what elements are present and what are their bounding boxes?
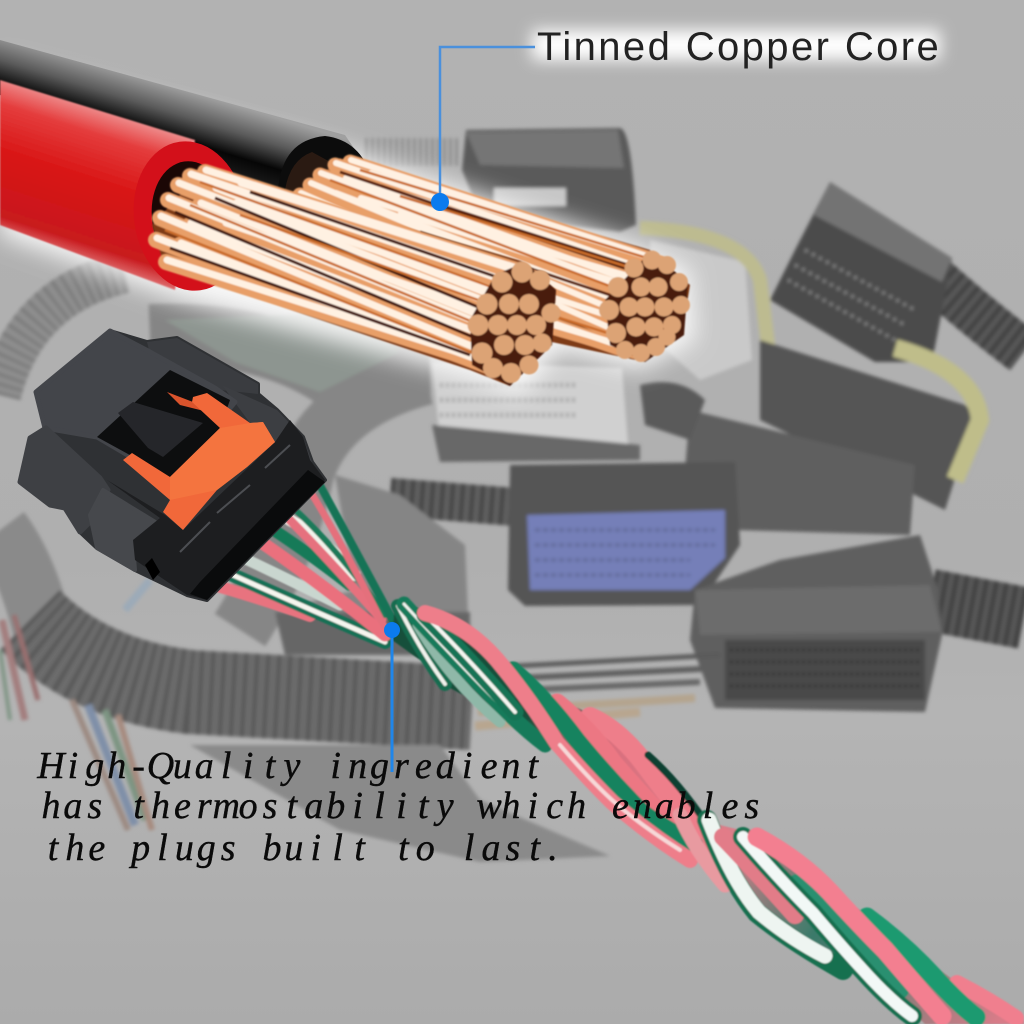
orange latch — [123, 393, 275, 530]
description text: the plugs built to last. — [48, 827, 558, 869]
callout: high-quality ingredient — [36, 622, 759, 869]
description text: High-Quality ingredient — [36, 745, 540, 787]
connector silhouette — [20, 331, 325, 600]
leader line — [390, 630, 394, 772]
leader line — [440, 47, 535, 202]
label: Tinned Copper Core — [537, 25, 941, 69]
dark tail under tube — [190, 745, 610, 862]
top connector — [462, 128, 636, 232]
upper housing — [36, 331, 235, 480]
black sleeve opening — [278, 136, 372, 198]
white glow behind cable — [0, 60, 695, 395]
centre dark connector — [685, 410, 915, 535]
main pink strand — [425, 613, 690, 860]
top tabs — [147, 338, 258, 394]
callout: tinned copper core — [431, 25, 941, 211]
right copper bundle — [300, 158, 690, 362]
left strand ends — [470, 262, 556, 386]
blue connector — [508, 462, 740, 606]
faded wire harness background — [0, 128, 1024, 862]
right strand ends — [605, 252, 688, 362]
third lobe — [90, 490, 157, 570]
loose wires — [0, 580, 720, 830]
right dark connector — [760, 340, 975, 510]
corrugated tubes — [0, 152, 1024, 708]
white side connector — [650, 240, 752, 380]
left copper bundle — [152, 168, 560, 386]
white striped strand — [707, 820, 843, 970]
top right connector — [770, 182, 952, 362]
description text: has thermostability which enables — [42, 785, 759, 827]
black connector — [20, 331, 325, 600]
lower right connector — [690, 535, 942, 712]
right lobe — [222, 385, 312, 462]
twisted wire bundle — [392, 603, 1024, 1024]
leader dot — [431, 193, 449, 211]
white pin module — [432, 362, 628, 444]
latch window — [97, 370, 230, 477]
lower lobe — [20, 428, 108, 532]
black cable — [0, 40, 372, 200]
centre green strand — [513, 670, 695, 845]
collar and front plate — [107, 420, 325, 600]
greenish back connector — [165, 312, 400, 392]
lower green strand — [398, 606, 445, 684]
fan of wires from connector — [203, 480, 398, 642]
text glow — [532, 30, 940, 60]
grey connector shell — [280, 475, 468, 615]
leader dot — [384, 622, 400, 638]
red sleeve end — [124, 134, 256, 298]
bundle base — [392, 603, 1024, 1024]
upper pink strand — [590, 717, 730, 866]
red cable — [0, 80, 256, 298]
